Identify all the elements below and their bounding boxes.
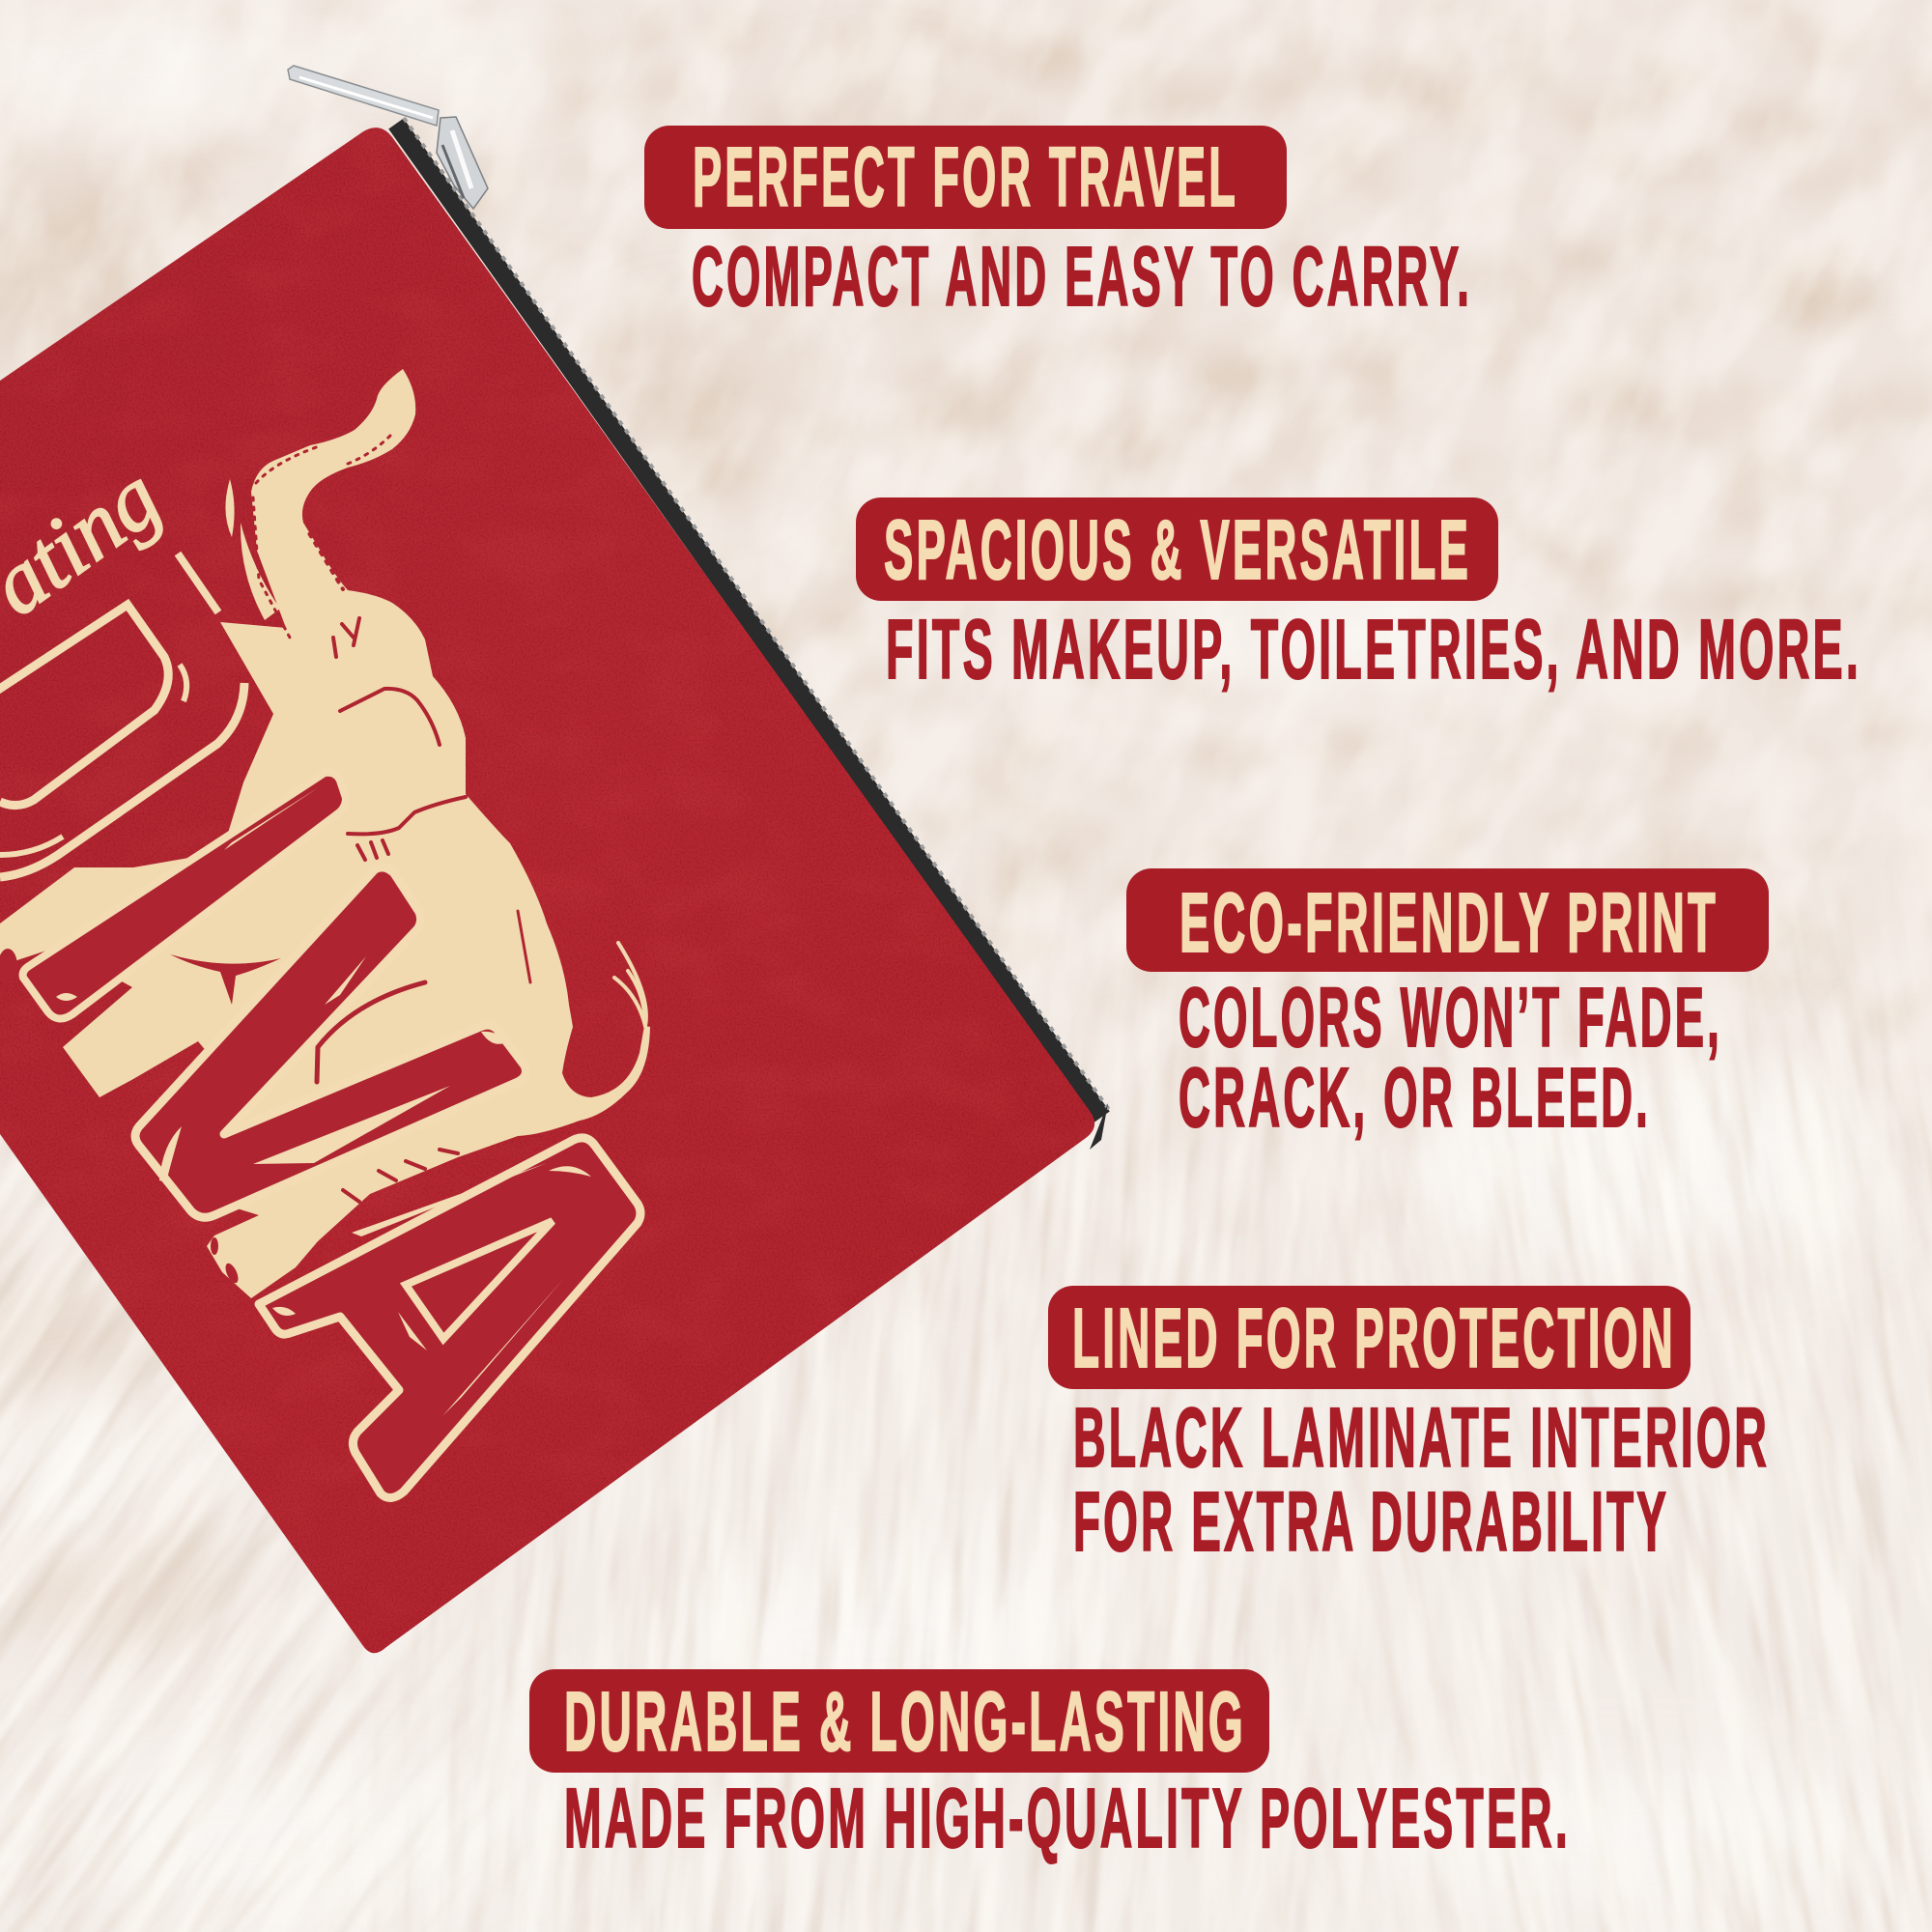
heading: DURABLE & LONG-LASTING [564,1675,1246,1769]
elephant silhouette [0,369,650,1298]
letter A [259,1138,640,1498]
heading pill [644,126,1287,229]
ear sliver [225,479,235,537]
tusk [241,523,280,620]
toes [0,949,241,1285]
letter I [23,773,346,1019]
soft fluff, upper rug [838,838,1094,1094]
feature: spacious and versatile [856,497,1861,696]
counter triangle [406,1221,553,1339]
fabric weave and mottling [0,97,1159,1690]
letter D [0,605,244,877]
tick stroke [178,554,218,612]
feature: durable and long-lasting [529,1669,1571,1865]
heading pill [1126,868,1769,972]
pouch body [0,128,1094,1653]
feature: eco-friendly print [1126,868,1769,1145]
soft tan clouds [153,2,1932,1126]
printed artwork: elephant and DIVA [0,369,650,1498]
heading pill [1048,1286,1690,1389]
feature: perfect for travel [644,126,1472,324]
feature: lined for protection [1048,1286,1770,1569]
tail tuft [614,943,646,1026]
elephant face and body lines [253,435,530,1202]
heading pill [856,497,1498,601]
heading: PERFECT FOR TRAVEL [693,130,1238,224]
heading pill [529,1669,1269,1773]
letter V [135,867,526,1217]
belly wedge mark [170,954,281,1005]
pouch: red zip bag [0,66,1159,1690]
zipper pull [288,66,488,209]
fanned fibres, lower rug [832,832,1100,1100]
zipper tape [396,118,1110,1150]
